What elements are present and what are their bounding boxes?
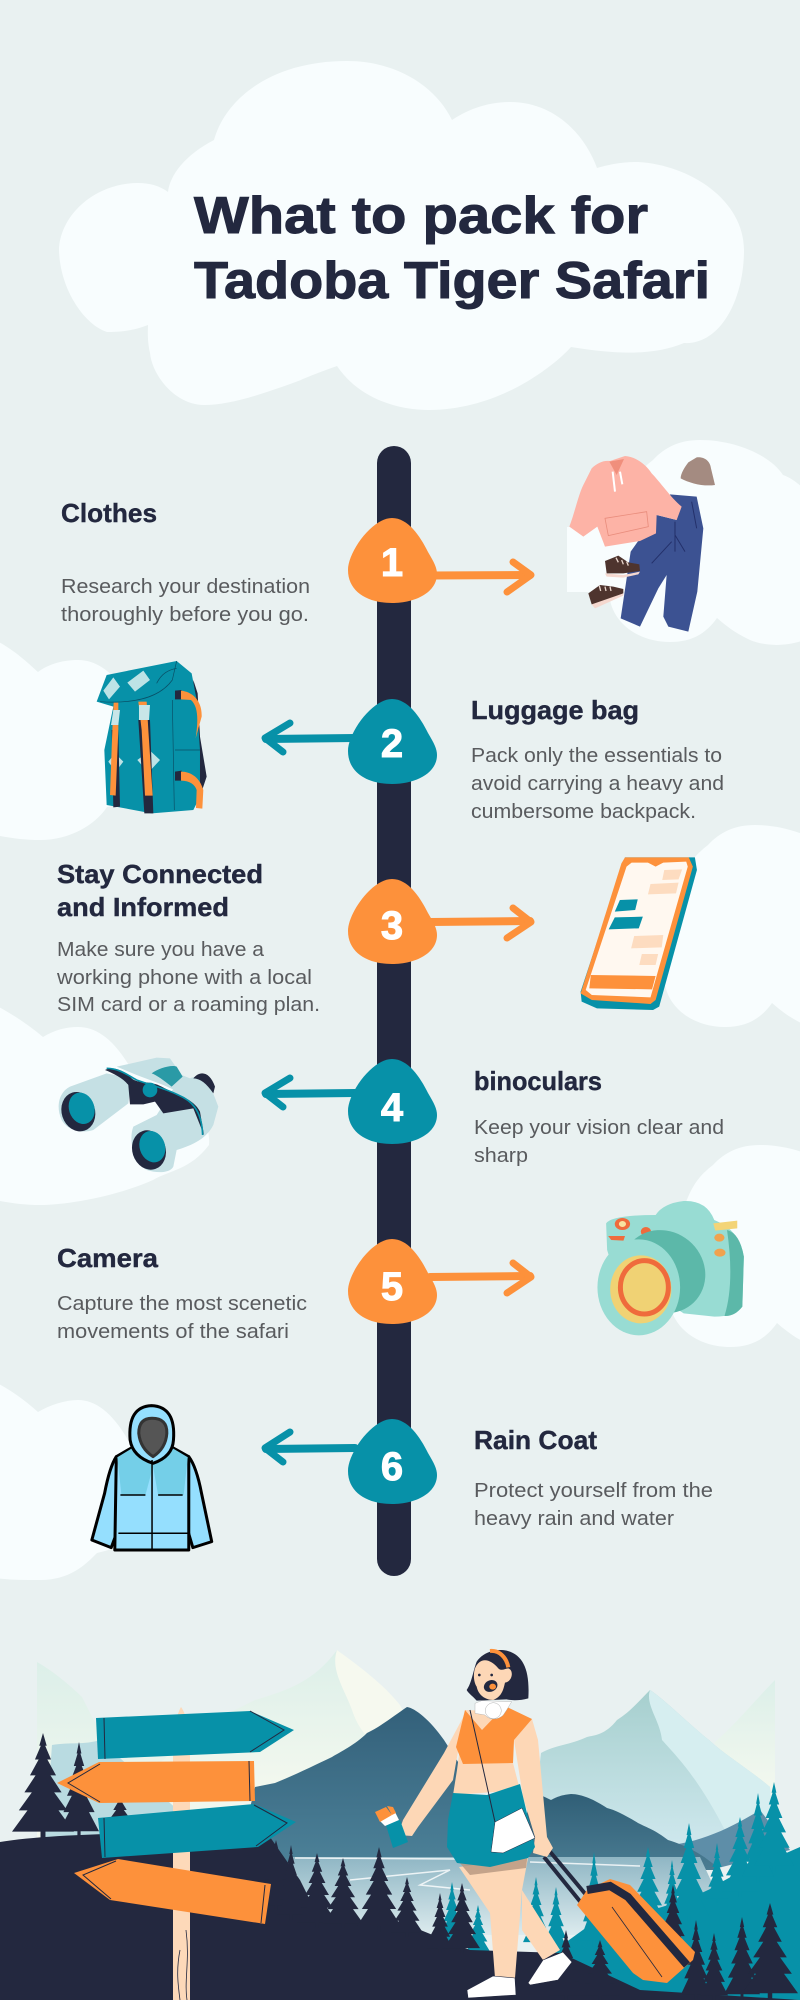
text block: stay connected: SIM card or a roaming plan. bbox=[57, 994, 320, 1016]
step 2 badge: 2 bbox=[381, 722, 403, 766]
text block: clothes bbox=[61, 498, 310, 626]
text block: stay connected: working phone with a local bbox=[56, 967, 312, 989]
text block: binoculars: sharp bbox=[474, 1145, 528, 1167]
icon: camera bbox=[597, 1201, 744, 1335]
step 5 badge: 5 bbox=[381, 1265, 403, 1309]
woman traveller bbox=[375, 1650, 695, 1998]
suitcase bbox=[544, 1848, 695, 1983]
text block: luggage bag: Pack only the essentials to bbox=[471, 745, 722, 767]
step 1 badge bbox=[348, 518, 437, 603]
text block: stay connected bbox=[56, 859, 320, 1016]
text block: rain coat: heavy rain and water bbox=[474, 1508, 674, 1530]
icon: backpack bbox=[97, 661, 207, 813]
text block: binoculars: binoculars bbox=[474, 1066, 602, 1096]
text block: luggage bag: cumbersome backpack. bbox=[471, 801, 696, 823]
step 6 badge bbox=[348, 1419, 437, 1504]
text block: rain coat: Rain Coat bbox=[474, 1425, 597, 1455]
scene: background mountains bbox=[37, 1650, 775, 1860]
step 3 badge: 3 bbox=[381, 904, 403, 948]
title: What to pack for bbox=[194, 187, 648, 245]
scene: navy hill and trees bbox=[0, 1733, 800, 2000]
title bbox=[194, 187, 710, 310]
text block: camera: Capture the most scenetic bbox=[57, 1293, 307, 1315]
text block: stay connected: Stay Connected bbox=[57, 859, 263, 889]
text block: luggage bag: avoid carrying a heavy and bbox=[471, 773, 724, 795]
step 2 badge bbox=[348, 699, 437, 784]
step 1 badge: 1 bbox=[381, 541, 403, 585]
icon: clothes bbox=[569, 456, 715, 632]
arrow 6 bbox=[265, 1432, 355, 1462]
title cloud bbox=[59, 61, 744, 410]
step 4 badge: 4 bbox=[381, 1086, 404, 1130]
step 4 badge bbox=[348, 1059, 437, 1144]
step 6 badge: 6 bbox=[381, 1445, 403, 1489]
arrow 3 bbox=[430, 908, 531, 938]
icon: binoculars bbox=[56, 1058, 218, 1174]
hair and face bbox=[467, 1650, 529, 1701]
step 5 badge bbox=[348, 1239, 437, 1324]
text block: camera: movements of the safari bbox=[57, 1321, 289, 1343]
icon: rain coat bbox=[92, 1406, 212, 1550]
title: Tadoba Tiger Safari bbox=[194, 252, 710, 310]
text block: binoculars bbox=[474, 1066, 724, 1167]
text block: clothes: Clothes bbox=[61, 498, 157, 528]
text block: clothes: thoroughly before you go. bbox=[61, 604, 309, 626]
text block: binoculars: Keep your vision clear and bbox=[474, 1117, 724, 1139]
text block: stay connected: Make sure you have a bbox=[57, 939, 265, 961]
text block: stay connected: and Informed bbox=[57, 892, 229, 922]
text block: rain coat: Protect yourself from the bbox=[474, 1480, 713, 1502]
text block: clothes: Research your destination bbox=[61, 576, 310, 598]
arrow 1 bbox=[430, 562, 531, 592]
text block: luggage bag bbox=[471, 695, 724, 823]
text block: luggage bag: Luggage bag bbox=[471, 695, 639, 725]
ticket bbox=[375, 1806, 408, 1848]
step 3 badge bbox=[348, 879, 437, 964]
scene: dark mountains bbox=[240, 1707, 790, 1870]
icon: phone bbox=[581, 857, 697, 1010]
timeline bar bbox=[377, 446, 411, 1576]
side clouds bbox=[0, 440, 800, 1580]
signpost bbox=[57, 1707, 296, 2000]
scene: lake bbox=[290, 1857, 720, 1935]
text block: camera bbox=[57, 1243, 307, 1343]
text block: rain coat bbox=[474, 1425, 713, 1530]
headphones bbox=[475, 1701, 512, 1719]
scene: teal hill and trees bbox=[417, 1782, 800, 2000]
arrow 4 bbox=[265, 1078, 355, 1107]
arrow 5 bbox=[430, 1263, 531, 1293]
arrow 2 bbox=[265, 723, 355, 752]
text block: camera: Camera bbox=[57, 1243, 159, 1273]
